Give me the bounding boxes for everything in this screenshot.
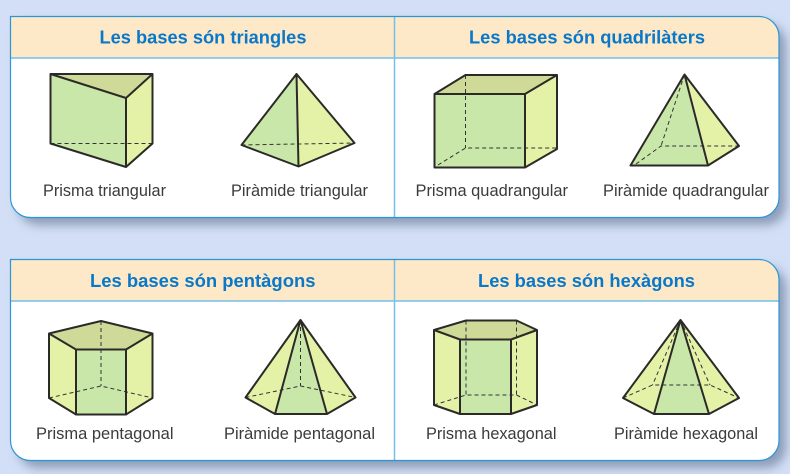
label: quadrangular prism: Prisma quadrangular xyxy=(416,182,569,200)
label: quadrangular pyramid: Piràmide quadrangular xyxy=(603,182,770,200)
heading: triangles: Les bases són triangles xyxy=(100,26,306,48)
icon: hexagonal prism xyxy=(434,320,537,414)
heading: pentagons: Les bases són pentàgons xyxy=(90,270,316,291)
heading: hexagons: Les bases són hexàgons xyxy=(478,270,695,291)
icon: hexagonal pyramid xyxy=(623,320,739,414)
label: triangular pyramid: Piràmide triangular xyxy=(231,182,369,200)
panel: top row xyxy=(10,16,786,225)
label: hexagonal pyramid: Piràmide hexagonal xyxy=(614,425,758,443)
icon: triangular prism xyxy=(50,74,152,167)
label: triangular prism: Prisma triangular xyxy=(43,182,167,200)
heading: quadrilaterals: Les bases són quadrilàters xyxy=(469,26,705,48)
panel: bottom row xyxy=(10,260,786,468)
icon: quadrangular prism xyxy=(434,75,557,168)
icon: quadrangular pyramid xyxy=(630,74,739,166)
label: hexagonal prism: Prisma hexagonal xyxy=(426,425,556,443)
label: pentagonal prism: Prisma pentagonal xyxy=(36,425,174,443)
icon: pentagonal pyramid xyxy=(246,320,356,414)
label: pentagonal pyramid: Piràmide pentagonal xyxy=(224,425,375,443)
icon: pentagonal prism xyxy=(49,321,152,414)
icon: triangular pyramid xyxy=(242,74,354,166)
